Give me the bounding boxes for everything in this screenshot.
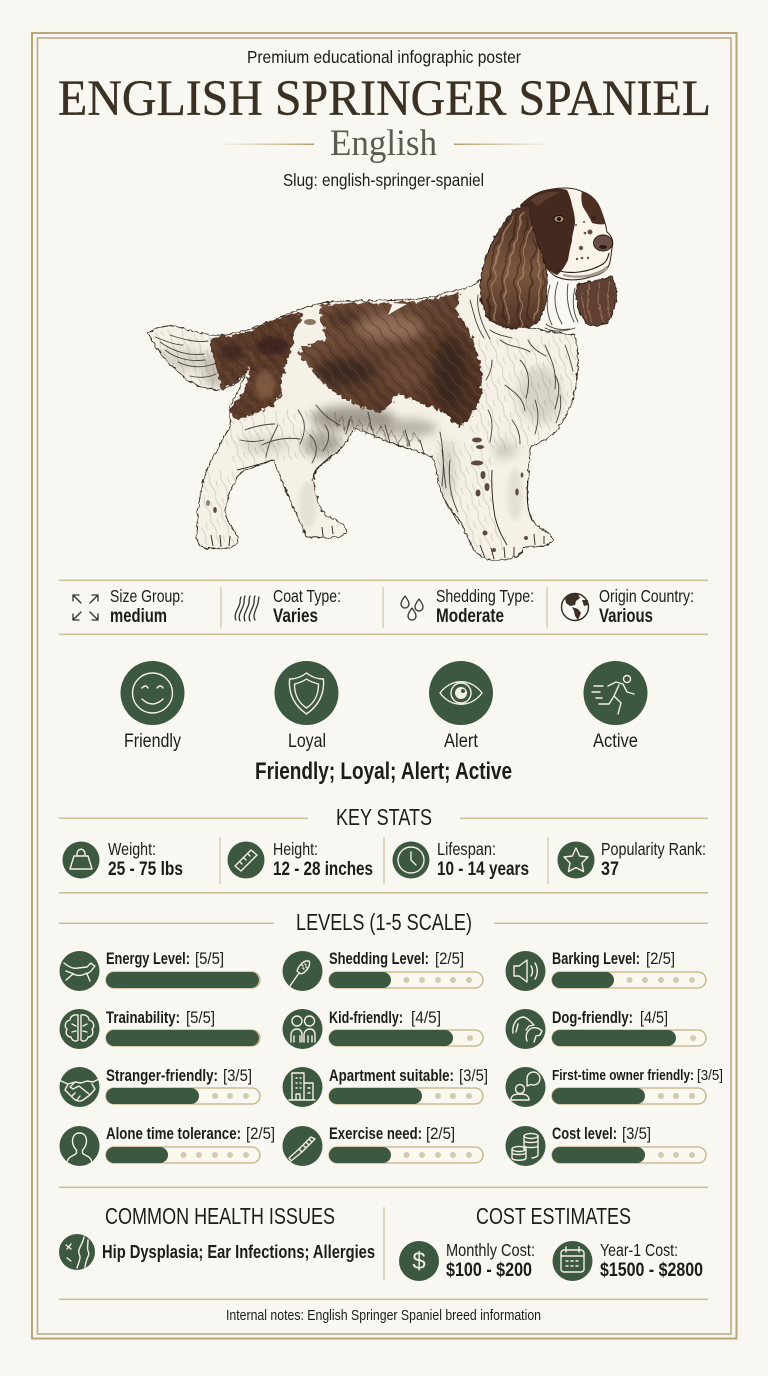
- level: dog-friendly: [4/5]: [640, 1008, 668, 1027]
- shedding type: Moderate: [436, 606, 504, 627]
- year-1 cost: [552, 1240, 703, 1281]
- panel: common health issues: [59, 1203, 375, 1270]
- stat: weight: 25 - 75 lbs: [108, 859, 183, 880]
- icon: coat hair: [235, 596, 259, 621]
- panel: common health issues: COMMON HEALTH ISSUES: [105, 1203, 335, 1229]
- origin country: Various: [599, 606, 653, 627]
- coat type: Varies: [273, 606, 318, 627]
- stat: height: 12 - 28 inches: [273, 859, 373, 880]
- title: ENGLISH SPRINGER SPANIEL: [58, 71, 711, 127]
- stat: lifespan: 10 - 14 years: [437, 859, 529, 880]
- level: cost: [506, 1124, 706, 1166]
- slug: Slug: english-springer-spaniel: [283, 170, 484, 190]
- heading: key stats: KEY STATS: [336, 804, 432, 830]
- level: cost: [3/5]: [622, 1124, 651, 1143]
- eye near: [554, 216, 564, 222]
- icon: joint: [59, 1234, 95, 1270]
- toes: [211, 526, 544, 559]
- level: alone time tolerance: Alone time tolerance:: [106, 1124, 241, 1143]
- level: energy: Energy Level:: [106, 949, 190, 968]
- eye far: [592, 216, 596, 220]
- soft shading on coat: [157, 348, 562, 529]
- freckles: [575, 221, 592, 260]
- level: dog-friendly: Dog-friendly:: [552, 1008, 633, 1027]
- white fur texture: [150, 330, 576, 550]
- trait: active: Active: [593, 730, 638, 752]
- heading: levels: LEVELS (1-5 SCALE): [296, 909, 472, 935]
- stat: popularity rank: [558, 839, 706, 880]
- stat: weight: Weight:: [108, 839, 156, 859]
- coat type: Coat Type:: [273, 586, 341, 606]
- stat: height: [228, 839, 373, 880]
- dog body base: [148, 280, 578, 560]
- level: cost: Cost level:: [552, 1124, 617, 1143]
- header: title block: [58, 47, 711, 190]
- monthly cost: Monthly Cost:: [446, 1240, 535, 1260]
- trait: active: [584, 661, 648, 752]
- level: stranger-friendly: Stranger-friendly:: [106, 1066, 218, 1085]
- monthly cost: [399, 1240, 535, 1281]
- level: shedding: [282, 949, 483, 991]
- face details: [554, 216, 612, 278]
- level: kid-friendly: [4/5]: [411, 1008, 441, 1027]
- origin country: [599, 586, 694, 627]
- leg spots: [206, 438, 528, 552]
- level: first-time owner friendly: [506, 1067, 723, 1107]
- stat: lifespan: Lifespan:: [437, 839, 496, 859]
- size group: Size Group:: [110, 586, 184, 606]
- level: apartment suitable: Apartment suitable:: [329, 1066, 454, 1085]
- subtitle with flanking lines: English: [330, 123, 437, 164]
- level: energy: [5/5]: [195, 949, 224, 968]
- head base: [523, 188, 613, 280]
- stat: popularity rank: Popularity Rank:: [601, 839, 706, 859]
- icon: water drops: [401, 596, 423, 620]
- size group: medium: [110, 606, 167, 627]
- monthly cost: $100 - $200: [446, 1260, 532, 1281]
- nose: [594, 235, 612, 251]
- level: stranger-friendly: [60, 1066, 260, 1107]
- illustration: springer spaniel: [148, 188, 617, 560]
- temperament traits: [120, 661, 648, 785]
- level: dog-friendly: [506, 1008, 706, 1049]
- footer note: Internal notes: English Springer Spaniel breed information: [226, 1307, 541, 1324]
- shedding type: Shedding Type:: [436, 586, 534, 606]
- panel: cost estimates: COST ESTIMATES: [476, 1203, 631, 1229]
- near ear: [480, 207, 547, 328]
- level: alone time tolerance: [60, 1124, 275, 1166]
- belly fringe: [335, 412, 421, 446]
- saddle white marking and speck: [304, 303, 407, 325]
- stat: weight: [62, 839, 183, 880]
- panel: key stats: [59, 804, 708, 894]
- size group: [110, 586, 184, 627]
- head brown markings: [520, 189, 605, 275]
- trait: friendly: [120, 661, 184, 752]
- level: first-time owner friendly: First-time owner friendly:: [552, 1068, 694, 1084]
- trait: loyal: Loyal: [288, 730, 326, 752]
- icon: globe: [562, 594, 588, 620]
- icon: size arrows: [73, 595, 98, 620]
- level: barking: Barking Level:: [552, 949, 640, 968]
- level: exercise need: [282, 1124, 483, 1166]
- monthly cost: $: [412, 1248, 426, 1275]
- panel: cost estimates: [399, 1203, 703, 1281]
- trait: loyal: [274, 661, 338, 752]
- level: exercise need: Exercise need:: [329, 1124, 422, 1143]
- hip and tail brown patch: [210, 312, 303, 420]
- traits summary: Friendly; Loyal; Alert; Active: [255, 758, 512, 785]
- year-1 cost: $1500 - $2800: [600, 1260, 703, 1281]
- stat: lifespan: [392, 839, 529, 880]
- stat: popularity rank: 37: [601, 859, 619, 880]
- shedding type: [436, 586, 534, 627]
- trait: alert: Alert: [444, 730, 478, 752]
- saddle tone variation: [298, 293, 482, 426]
- panel: levels: [59, 909, 723, 1166]
- level: stranger-friendly: [3/5]: [223, 1066, 252, 1085]
- origin country: Origin Country:: [599, 586, 694, 606]
- level: trainability: [60, 1008, 260, 1049]
- neck ruff and chest fur strokes: [155, 282, 578, 524]
- far ear: [576, 276, 617, 326]
- level: kid-friendly: Kid-friendly:: [329, 1008, 403, 1027]
- coat type: [273, 586, 341, 627]
- stat: height: Height:: [273, 839, 318, 859]
- level: alone time tolerance: [2/5]: [246, 1124, 275, 1143]
- level: barking: [506, 949, 706, 991]
- level: shedding: Shedding Level:: [329, 949, 429, 968]
- leg inner outlines: [237, 455, 532, 545]
- hip tone variation: [220, 337, 288, 399]
- trait: alert: [429, 661, 493, 752]
- brown saddle patch: [297, 293, 482, 427]
- ear hair streaks: [488, 212, 543, 327]
- level: exercise need: [2/5]: [426, 1124, 455, 1143]
- eyebrow text: Premium educational infographic poster: [247, 47, 521, 67]
- info strip: breed facts: [59, 580, 708, 635]
- year-1 cost: Year-1 Cost:: [600, 1240, 678, 1260]
- level: apartment suitable: [282, 1066, 488, 1107]
- level: shedding: [2/5]: [435, 949, 464, 968]
- level: trainability: [5/5]: [186, 1008, 215, 1027]
- level: trainability: Trainability:: [106, 1008, 180, 1027]
- mouth and lip shading: [557, 253, 609, 278]
- level: first-time owner friendly: [3/5]: [697, 1068, 723, 1084]
- level: barking: [2/5]: [646, 949, 675, 968]
- panel: common health issues: Hip Dysplasia; Ear Infections; Allergies: [102, 1242, 375, 1262]
- trait: friendly: Friendly: [124, 730, 181, 752]
- level: energy: [60, 949, 260, 991]
- level: apartment suitable: [3/5]: [459, 1066, 488, 1085]
- level: kid-friendly: [282, 1008, 483, 1049]
